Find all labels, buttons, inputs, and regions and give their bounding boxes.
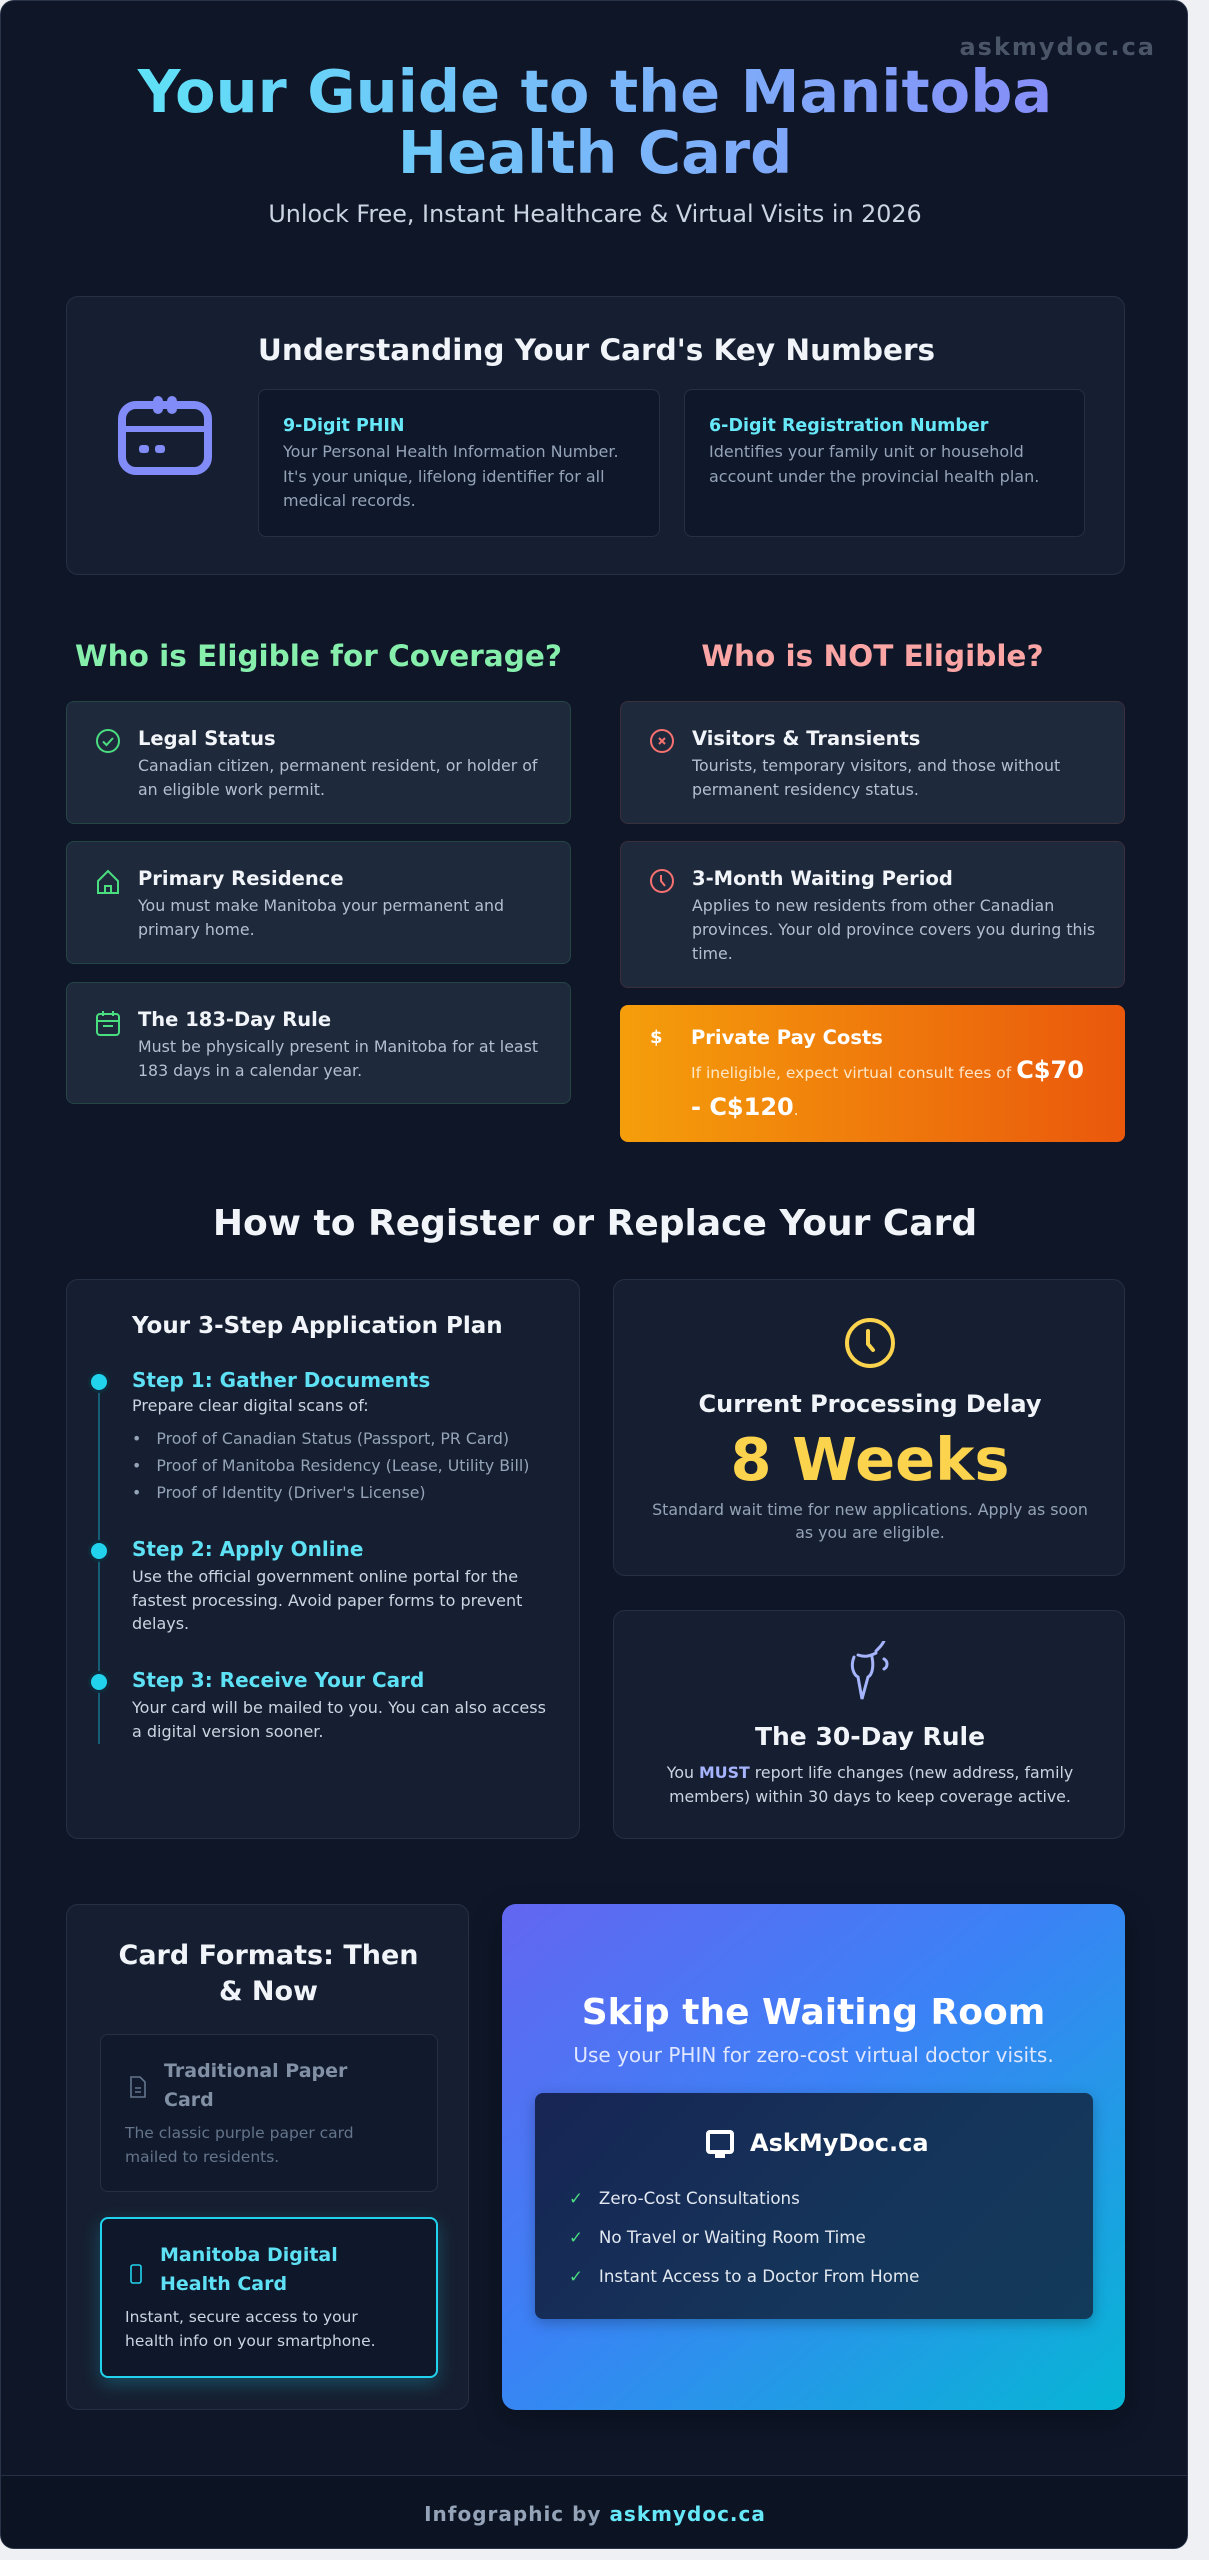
icon: phone <box>130 2264 142 2284</box>
step 1: Step 1: Gather Documents <box>132 1368 430 1392</box>
icon: x circle <box>650 729 674 753</box>
step 2 <box>88 1537 522 1633</box>
card: private pay <box>620 1005 1125 1142</box>
card: visitors: Visitors & Transients <box>692 727 920 750</box>
title: Your Guide to the Manitoba <box>138 57 1052 126</box>
checklist: ✓ No Travel or Waiting Room Time <box>569 2227 866 2247</box>
card: legal status <box>66 701 571 824</box>
box: registration number: 6-Digit Registration Number <box>709 416 988 436</box>
stat: 8 weeks: 8 Weeks <box>731 1425 1009 1494</box>
card: private pay: Private Pay Costs <box>691 1026 883 1049</box>
card: legal status: Legal Status <box>138 727 276 750</box>
heading: register: How to Register or Replace Your Card <box>213 1203 977 1244</box>
icon: check circle <box>96 729 120 753</box>
box: digital health card: Manitoba Digital Health Card <box>160 2244 338 2295</box>
box: traditional paper card: The classic purple paper card mailed to residents. <box>125 2124 354 2166</box>
card: legal status: Canadian citizen, permanent resident, or holder of an eligible work permit. <box>138 756 537 799</box>
box: registration number <box>684 389 1085 537</box>
icon: bell <box>850 1641 888 1700</box>
watermark: askmydoc.ca <box>959 33 1156 61</box>
box: registration number: Identifies your family unit or household account under the provincial health plan. <box>709 442 1039 486</box>
panel: processing delay: Standard wait time for new applications. Apply as soon as you are eligible. <box>652 1500 1088 1542</box>
box: traditional paper card <box>100 2034 438 2192</box>
step 1: • Proof of Canadian Status (Passport, PR Card) <box>132 1429 509 1448</box>
timeline line <box>98 1382 100 1744</box>
card: waiting period: Applies to new residents from other Canadian provinces. Your old province covers you during this time. <box>692 896 1095 963</box>
card: 183-day rule: Must be physically present in Manitoba for at least 183 days in a calendar year. <box>138 1037 538 1080</box>
panel: 30-day rule: The 30-Day Rule <box>755 1722 985 1751</box>
step 3: Your card will be mailed to you. You can also access a digital version sooner. <box>132 1698 546 1740</box>
panel: processing delay: Current Processing Delay <box>699 1390 1041 1418</box>
icon: clock yellow <box>845 1318 895 1368</box>
box: askmydoc: AskMyDoc.ca <box>750 2129 929 2157</box>
panel: 30-day rule <box>613 1610 1125 1839</box>
step 3 <box>88 1668 546 1740</box>
icon: id card <box>118 396 212 475</box>
title: Health Card <box>398 118 792 187</box>
heading: card formats <box>118 1940 418 2007</box>
checklist: ✓ Instant Access to a Doctor From Home <box>569 2266 919 2286</box>
card: private pay: - C$120. <box>691 1093 799 1121</box>
step 1: • Proof of Manitoba Residency (Lease, Utility Bill) <box>132 1456 529 1475</box>
step 1: Prepare clear digital scans of: <box>132 1396 369 1415</box>
step 2: Step 2: Apply Online <box>132 1537 363 1561</box>
panel: processing delay <box>613 1279 1125 1576</box>
step 1: • Proof of Identity (Driver's License) <box>132 1483 426 1502</box>
heading: eligible: Who is Eligible for Coverage? <box>75 639 562 673</box>
icon: dollar: $ <box>650 1027 663 1048</box>
checklist: ✓ Zero-Cost Consultations <box>569 2188 800 2208</box>
card: primary residence: Primary Residence <box>138 867 344 890</box>
card: private pay: If ineligible, expect virtual consult fees of C$70 <box>691 1056 1084 1084</box>
heading: card formats: & Now <box>219 1976 318 2007</box>
card: 183-day rule <box>66 982 571 1104</box>
icon: document <box>130 2076 146 2098</box>
panel: 3-step plan <box>66 1279 580 1839</box>
panel: key numbers <box>66 296 1125 575</box>
heading: not eligible: Who is NOT Eligible? <box>701 639 1044 673</box>
title <box>1 61 1189 183</box>
box: PHIN: Your Personal Health Information Number. It's your unique, lifelong identifier for all medical records. <box>283 442 619 510</box>
icon: calendar <box>96 1011 120 1036</box>
step 2: Use the official government online portal for the fastest processing. Avoid paper forms to prevent delays. <box>132 1567 522 1633</box>
heading: skip: Skip the Waiting Room <box>582 1992 1045 2033</box>
panel: card formats <box>66 1904 469 2410</box>
box: traditional paper card: Traditional Paper Card <box>164 2060 347 2111</box>
footer: Infographic by askmydoc.ca <box>424 2502 766 2526</box>
card: visitors <box>620 701 1125 824</box>
box: askmydoc <box>535 2093 1093 2319</box>
panel: skip the waiting room: Use your PHIN for zero-cost virtual doctor visits. <box>573 2043 1054 2067</box>
checklist <box>569 2188 919 2286</box>
card: visitors: Tourists, temporary visitors, and those without permanent residency status. <box>692 756 1060 799</box>
step 3: Step 3: Receive Your Card <box>132 1668 424 1692</box>
panel: 30-day rule: You MUST report life changes (new address, family members) within 30 days to keep coverage active. <box>667 1763 1073 1806</box>
box: PHIN <box>258 389 660 537</box>
card: 183-day rule: The 183-Day Rule <box>138 1008 331 1031</box>
subtitle: Unlock Free, Instant Healthcare & Virtual Visits in 2026 <box>268 200 922 228</box>
heading: plan: Your 3-Step Application Plan <box>132 1313 503 1339</box>
icon: clock <box>650 869 674 893</box>
card: primary residence <box>66 841 571 964</box>
box: digital health card <box>100 2217 438 2378</box>
step 1 <box>88 1368 529 1502</box>
heading: card formats: Card Formats: Then <box>118 1940 418 1971</box>
footer <box>1 2475 1189 2551</box>
heading: key numbers: Understanding Your Card's Key Numbers <box>258 333 935 367</box>
card: waiting period <box>620 841 1125 988</box>
box: PHIN: 9-Digit PHIN <box>283 416 405 436</box>
box: digital health card: Instant, secure access to your health info on your smartphone. <box>125 2308 376 2350</box>
icon: house <box>97 870 119 894</box>
card: waiting period: 3-Month Waiting Period <box>692 867 953 890</box>
icon: monitor <box>706 2130 734 2158</box>
panel: skip the waiting room <box>502 1904 1125 2410</box>
card: primary residence: You must make Manitoba your permanent and primary home. <box>138 896 504 939</box>
